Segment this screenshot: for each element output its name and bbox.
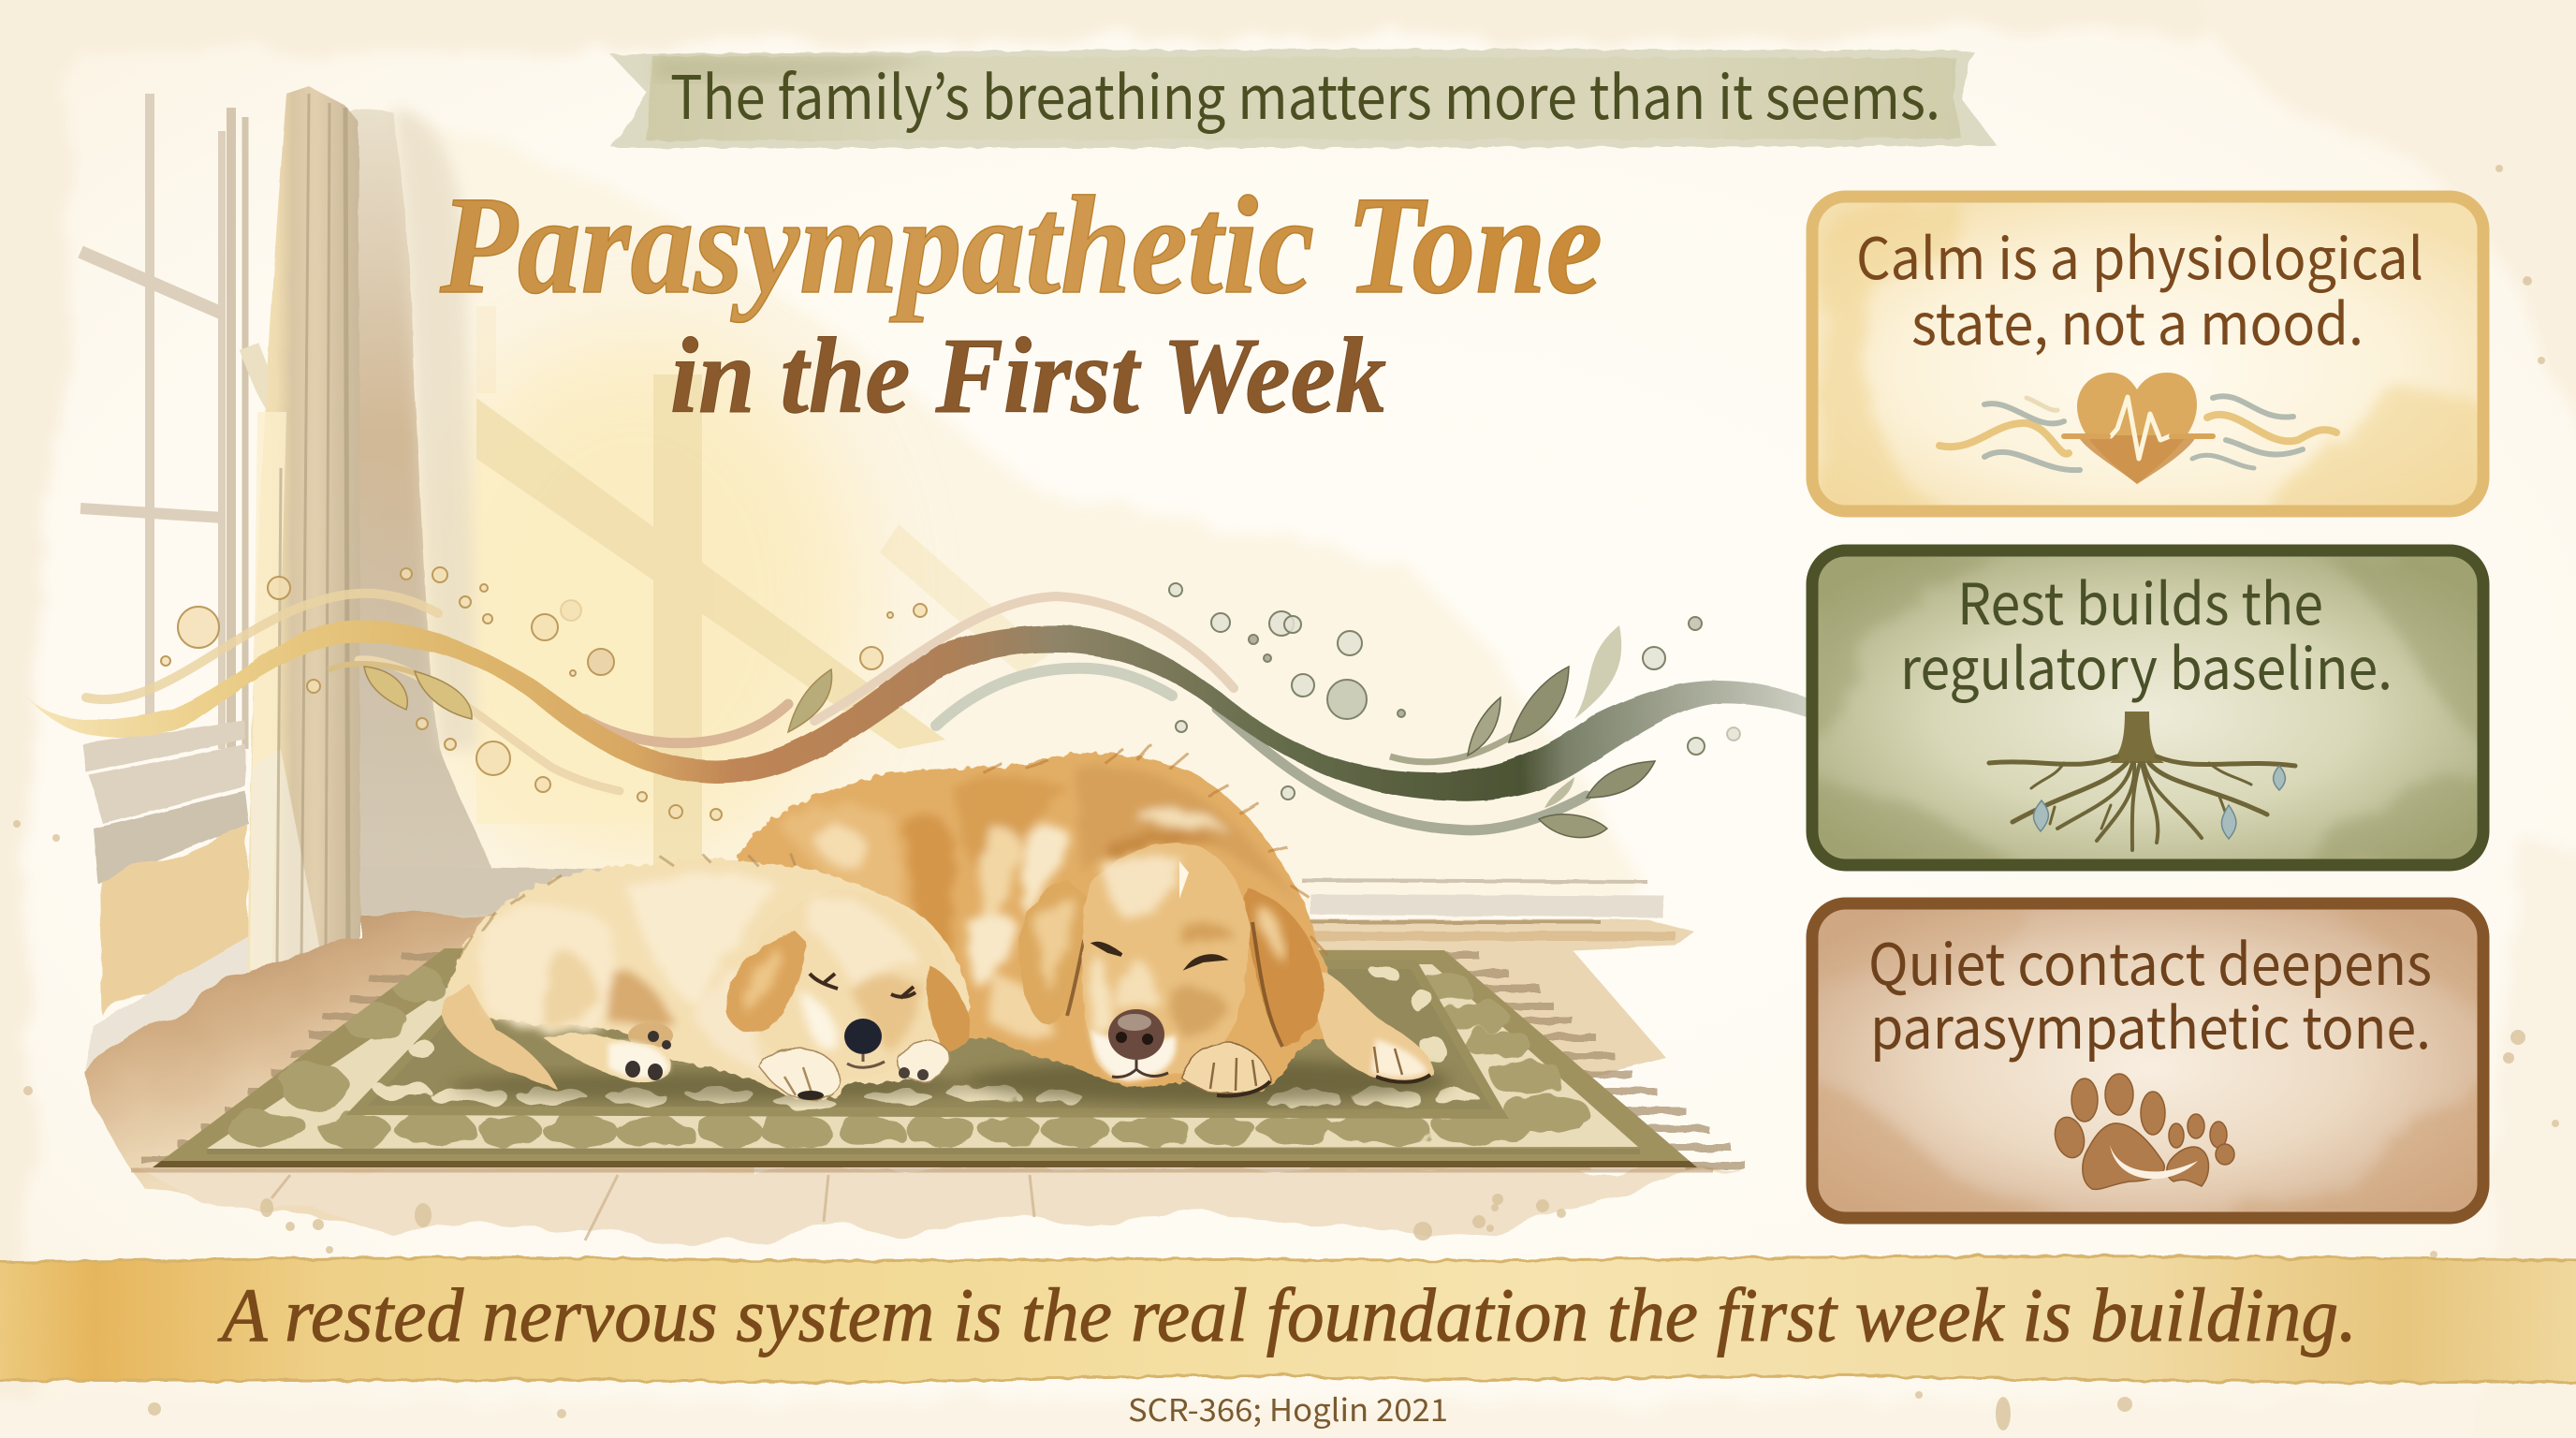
ribbon text: The family’s breathing matters more than it seems. <box>670 51 1940 137</box>
card text: Rest builds the <box>1957 558 2323 641</box>
card text <box>1900 558 2393 706</box>
secondary strands <box>86 594 1587 830</box>
top ribbon banner <box>610 49 1998 148</box>
title <box>439 168 1603 436</box>
adult nose and mouth <box>1108 1009 1164 1060</box>
citation: SCR-366; Hoglin 2021 <box>1128 1386 1448 1431</box>
bottom banner <box>0 1256 2576 1383</box>
card text <box>1868 918 2432 1065</box>
takeaway text: A rested nervous system is the real foundation the first week is building. <box>217 1272 2357 1357</box>
gold bubbles <box>161 567 927 820</box>
green leaves <box>1390 625 1655 838</box>
card text: state, not a mood. <box>1911 278 2364 361</box>
room illustration: wall, window, curtain and floor <box>80 86 1741 1245</box>
icon: two paws <box>2051 1074 2234 1189</box>
adult muzzle <box>1090 1030 1176 1081</box>
puppy hind paws <box>628 1022 673 1049</box>
floor below rug <box>140 1168 1741 1245</box>
puppy fur strokes <box>459 854 796 960</box>
icon: heart with pulse and waves <box>1939 373 2336 484</box>
adult fur strokes <box>983 744 1327 955</box>
icon: roots and water drops <box>1989 712 2295 850</box>
puppy front paws <box>760 1048 840 1100</box>
tan leaves <box>329 664 832 732</box>
rug <box>131 948 1746 1170</box>
rug band motifs <box>226 966 1590 1150</box>
puppy eyes <box>810 974 838 989</box>
adult fur washes <box>777 767 1303 1036</box>
rug inner band <box>207 964 1638 1149</box>
rug inner line <box>357 964 1500 1114</box>
puppy body <box>446 859 970 1099</box>
adult body <box>736 753 1339 1094</box>
main ribbon <box>23 620 1807 801</box>
card: rest <box>1807 550 2490 871</box>
curtain <box>248 86 360 972</box>
card text: Quiet contact deepens <box>1868 918 2432 1002</box>
wall shadow <box>347 109 505 922</box>
card text: parasympathetic tone. <box>1870 982 2431 1065</box>
card text: regulatory baseline. <box>1900 623 2393 706</box>
adult front paw left <box>1180 1043 1270 1093</box>
adult right foreleg <box>1313 972 1433 1082</box>
adult ears and face <box>1018 880 1095 1024</box>
golden retriever puppy sleeping <box>441 854 973 1101</box>
title line 2: in the First Week <box>670 316 1386 436</box>
sun glow <box>412 337 861 861</box>
rug field motifs <box>374 966 1478 1109</box>
rug fringe <box>140 955 1746 1166</box>
adult eyes <box>1095 944 1121 955</box>
puppy nose <box>844 1019 882 1054</box>
adult golden retriever sleeping <box>736 744 1451 1104</box>
card: quiet contact <box>1811 903 2490 1226</box>
window sill and wall below window <box>82 721 245 824</box>
card text: Calm is a physiological <box>1856 213 2423 296</box>
floor left <box>82 915 749 1226</box>
wall wash <box>374 103 1657 917</box>
card: calm <box>1812 197 2490 524</box>
puppy ears <box>725 932 805 1033</box>
flowing breath ribbon <box>23 567 1807 838</box>
floor right <box>1301 919 1694 1170</box>
green bubbles <box>1169 583 1740 800</box>
title line 1: Parasympathetic Tone <box>439 168 1603 323</box>
baseboard <box>360 866 1664 917</box>
window panes <box>80 94 290 749</box>
card text <box>1856 213 2423 361</box>
puppy head <box>743 889 947 1079</box>
light beams <box>476 306 1048 880</box>
puppy fur washes <box>480 874 777 1072</box>
puppy tail <box>441 983 558 1090</box>
